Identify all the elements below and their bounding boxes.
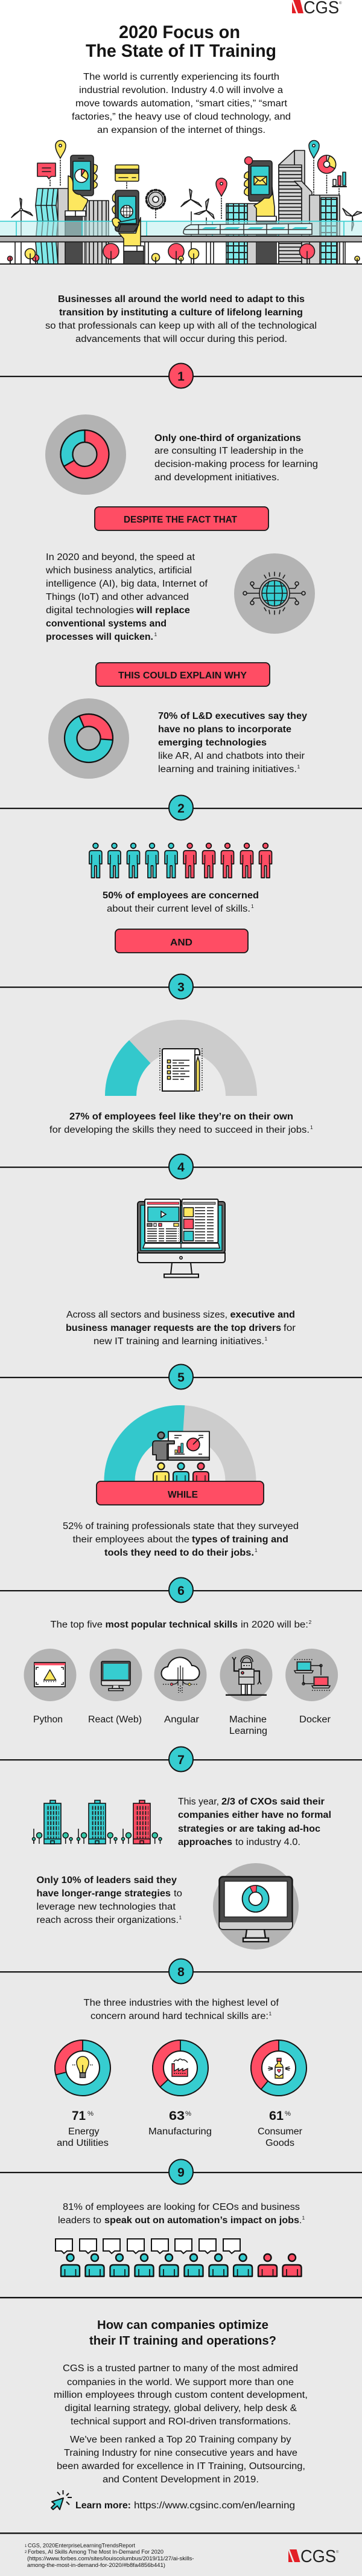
- skill: machine learning: Learning: [229, 1726, 267, 1736]
- text: 50 percent of employees: 50% of employees are concerned: [103, 890, 259, 901]
- text: learn more: [75, 2500, 295, 2511]
- monorail train: [183, 224, 312, 234]
- thin poles centre: [145, 211, 345, 264]
- text: 50 percent of employees: [103, 890, 259, 914]
- text: 52 percent of training professionals: types of training and: [192, 1534, 288, 1545]
- stat: manufacturing: [148, 2040, 212, 2137]
- half donut: 27 percent: [105, 1020, 257, 1096]
- icon: factory: [172, 2059, 188, 2076]
- intro text: factories,” the heavy use of cloud technology, and: [72, 112, 291, 122]
- text: speed of change: conventional systems and: [46, 619, 167, 629]
- text: top drivers: business manager requests are the top drivers: [66, 1323, 281, 1333]
- text: 10 percent of leaders: leverage new technologies that: [36, 1902, 176, 1912]
- intro text: an expansion of the internet of things.: [97, 125, 265, 135]
- skill: machine learning: [220, 1649, 273, 1736]
- skill: python: [24, 1649, 76, 1725]
- number badge 9: [0, 2159, 362, 2185]
- number badge 5: 5: [177, 1371, 185, 1385]
- text: top drivers: new IT training and learning initiatives.: [94, 1336, 264, 1347]
- dark sleeve left: [65, 214, 83, 264]
- number badge 4: [0, 1154, 362, 1179]
- text: 81 percent of employees: [58, 2202, 305, 2226]
- text: top five skills: The top five: [51, 1620, 103, 1630]
- text: 50 percent of employees: 1: [251, 903, 254, 909]
- right teal grid building: [226, 204, 257, 264]
- text: 70 percent of L&D executives: 1: [297, 764, 300, 770]
- text: about CGS: digital learning strategy, global delivery, help desk &: [65, 2403, 297, 2413]
- icon: map pin red: [216, 178, 227, 219]
- stat: energy and utilities: Energy: [68, 2127, 100, 2137]
- text: 70 percent of L&D executives: 70% of L&D executives say they: [158, 711, 307, 721]
- icon: phone with envelope held in hand: [244, 157, 276, 221]
- footnotes: Forbes, AI Skills Among The Most In-Demand For 2020: [28, 2549, 164, 2555]
- text: 10 percent of leaders: to: [174, 1889, 182, 1899]
- text: two thirds of CXOs: to industry 4.0.: [235, 1837, 300, 1847]
- footnotes: 2: [25, 2551, 27, 2554]
- trees: [7, 243, 360, 264]
- right grey and teal building: [310, 195, 340, 264]
- logo: CGS top: ®: [339, 1, 342, 5]
- heading: how can companies optimize: [89, 2319, 276, 2348]
- text: awards: We've been ranked a Top 20 Training company by: [70, 2435, 291, 2445]
- text: 52 percent of training professionals: their employees about the: [72, 1534, 189, 1545]
- number badge 7: [0, 1747, 362, 1771]
- text: speed of change: processes will quicken.: [46, 632, 153, 642]
- logo: CGS bottom: CGS: [300, 2547, 336, 2566]
- title: 2020 Focus on: [119, 22, 240, 42]
- icon: left wind turbine: [11, 198, 33, 264]
- text: one third of organizations: [154, 433, 318, 483]
- footnotes: 1: [25, 2545, 27, 2548]
- number badge 2: [0, 795, 362, 820]
- intro statement: [45, 294, 317, 344]
- icon: credit card: [115, 165, 139, 190]
- text: 52 percent of training professionals: 52% of training professionals state that they surveyed: [63, 1521, 299, 1531]
- skill: react web: [88, 1649, 142, 1725]
- button: and: [115, 929, 248, 953]
- text: 52 percent of training professionals: [63, 1521, 299, 1558]
- text: two thirds of CXOs: 2/3 of CXOs said their: [221, 1797, 325, 1807]
- icon: presenter and audience: [153, 1432, 209, 1482]
- text: top drivers: 1: [264, 1336, 268, 1342]
- intro text: The world is currently experiencing its fourth: [83, 72, 279, 82]
- number badge 1: [0, 364, 362, 388]
- footnotes: among-the-most-in-demand-for-2020/#b8fa4856b441): [27, 2562, 165, 2569]
- text: 81 percent of employees: .: [299, 2215, 302, 2226]
- text: awards: been awarded for excellence in IT Training, Outsourcing,: [57, 2461, 305, 2471]
- number badge 3: 3: [177, 980, 185, 994]
- text: one third of organizations: Only one-third of organizations: [154, 433, 301, 443]
- donut: one third: [45, 414, 126, 495]
- stat: consumer goods: %: [285, 2110, 291, 2117]
- number badge 6: [0, 1578, 362, 1602]
- text: awards: [57, 2435, 305, 2485]
- left glass building: [36, 188, 68, 264]
- icon: chat bubble: [37, 163, 56, 187]
- stat: energy and utilities: 71: [72, 2109, 86, 2123]
- icon: desktop with e-learning book: [138, 1199, 225, 1277]
- pictogram: three buildings: [33, 1800, 162, 1844]
- logo: CGS bottom: ®: [336, 2550, 339, 2554]
- intro statement: transition by instituting a culture of lifelong learning: [59, 308, 303, 318]
- text: top five skills: in 2020 will be:: [241, 1620, 308, 1630]
- text: 81 percent of employees: 81% of employees are looking for CEOs and business: [63, 2202, 300, 2212]
- text: 27 percent of employees: 1: [310, 1124, 313, 1130]
- text: awards: Training Industry for nine consecutive years and have: [64, 2448, 297, 2458]
- icon: phone with globe and hand: [112, 190, 144, 264]
- text: three industries: 1: [269, 2011, 272, 2017]
- text: speed of change: [45, 552, 208, 642]
- text: two thirds of CXOs: approaches: [178, 1837, 232, 1847]
- number badge 8: [0, 1959, 362, 1984]
- text: three industries: concern around hard technical skills are:: [91, 2011, 268, 2021]
- footnotes: [25, 2542, 194, 2569]
- text: 10 percent of leaders: have longer-range strategies: [36, 1889, 171, 1899]
- footnotes: (https://www.forbes.com/sites/louiscolumbus/2019/11/27/ai-skills-: [27, 2555, 194, 2562]
- text: 81 percent of employees: 1: [302, 2215, 305, 2221]
- text: three industries: The three industries with the highest level of: [83, 1998, 279, 2008]
- button: despite the fact that: [95, 507, 268, 530]
- text: 70 percent of L&D executives: have no plans to incorporate: [158, 724, 291, 735]
- number badge 1: 1: [177, 370, 185, 384]
- intro text: [72, 72, 291, 135]
- text: 70 percent of L&D executives: emerging technologies: [158, 738, 267, 748]
- icon: phone with pie held in hand: [65, 155, 97, 216]
- text: 27 percent of employees: [49, 1112, 313, 1135]
- icon: light bulb: [72, 2056, 93, 2078]
- text: 70 percent of L&D executives: learning and training initiatives.: [158, 764, 297, 774]
- illustration: smart city skyline: [0, 140, 362, 265]
- button: and: AND: [170, 938, 192, 948]
- skill: react web: React (Web): [88, 1715, 142, 1725]
- text: 10 percent of leaders: reach across their organizations.: [36, 1915, 179, 1925]
- right turbines: [181, 189, 362, 231]
- number badge 7: 7: [177, 1753, 185, 1767]
- text: learn more: https://www.cgsinc.com/en/learning: [134, 2500, 295, 2511]
- number badge 5: [0, 1364, 362, 1389]
- text: two thirds of CXOs: This year,: [178, 1797, 219, 1807]
- icon: monitor with donut: [213, 1863, 299, 1950]
- text: speed of change: which business analytics, artificial: [45, 565, 192, 576]
- button: while: WHILE: [168, 1490, 198, 1500]
- text: 10 percent of leaders: 1: [179, 1914, 182, 1921]
- text: top drivers: for: [284, 1323, 296, 1333]
- tall isometric building: [279, 150, 312, 264]
- heading: how can companies optimize: their IT training and operations?: [89, 2334, 276, 2348]
- skill: angular: Angular: [164, 1715, 199, 1725]
- skill: python: Python: [33, 1715, 63, 1725]
- footnotes: CGS, 2020EnterpriseLearningTrendsReport: [28, 2542, 135, 2549]
- text: top five skills: 2: [309, 1619, 311, 1625]
- number badge 4: 4: [177, 1161, 185, 1174]
- text: one third of organizations: decision-making process for learning: [154, 459, 318, 469]
- text: speed of change: will replace: [136, 605, 190, 616]
- stat: consumer goods: Goods: [265, 2138, 294, 2148]
- stat: consumer goods: [251, 2040, 306, 2148]
- stat: energy and utilities: and Utilities: [57, 2138, 109, 2148]
- number badge 8: 8: [177, 1965, 185, 1979]
- icon: cursor click: [51, 2490, 72, 2510]
- text: top drivers: [66, 1310, 296, 1347]
- text: speed of change: 1: [154, 631, 157, 637]
- text: speed of change: Things (IoT) and other advanced: [46, 592, 189, 602]
- text: about CGS: technical support and ROI-driven transformations.: [71, 2417, 291, 2427]
- text: 52 percent of training professionals: 1: [255, 1547, 258, 1553]
- stat: energy and utilities: %: [87, 2110, 94, 2117]
- striped building: [86, 201, 109, 264]
- intro text: move towards automation, “smart cities,” “smart: [75, 98, 288, 109]
- text: 52 percent of training professionals: tools they need to do their jobs.: [104, 1548, 254, 1558]
- intro statement: Businesses all around the world need to adapt to this: [58, 294, 305, 304]
- icon: donut chart: [317, 155, 336, 195]
- icon: map pin yellow: [56, 140, 66, 187]
- pictogram: people with speech bubbles: [56, 2239, 302, 2276]
- text: about CGS: CGS is a trusted partner to many of the most admired: [63, 2363, 298, 2374]
- street building repeats below road: [256, 242, 276, 264]
- text: two thirds of CXOs: strategies or are taking ad-hoc: [178, 1824, 320, 1834]
- text: learn more: Learn more:: [75, 2500, 131, 2511]
- icon: bottle: [268, 2058, 290, 2078]
- pictogram: ten people: [89, 843, 272, 878]
- text: 81 percent of employees: speak out on automation’s impact on jobs: [104, 2215, 299, 2226]
- button: this could explain why: [96, 663, 270, 686]
- title: [86, 22, 276, 61]
- stat: manufacturing: 63: [169, 2109, 185, 2123]
- stat: manufacturing: Manufacturing: [148, 2127, 212, 2137]
- skill: docker: [285, 1649, 338, 1725]
- text: one third of organizations: are consulting IT leadership in the: [154, 446, 303, 456]
- icon: map pin teal: [309, 140, 319, 195]
- text: 70 percent of L&D executives: [158, 711, 307, 774]
- text: 50 percent of employees: about their current level of skills.: [107, 904, 250, 914]
- intro text: industrial revolution. Industry 4.0 will involve a: [79, 85, 283, 95]
- text: top five skills: [51, 1619, 311, 1630]
- rail glass overlay: [0, 222, 362, 236]
- text: awards: and Content Development in 2019.: [103, 2475, 259, 2485]
- number badge 2: 2: [177, 802, 185, 816]
- icon: globe with circuits: [234, 553, 315, 634]
- text: top five skills: most popular technical skills: [105, 1620, 238, 1630]
- text: two thirds of CXOs: companies either have no formal: [178, 1810, 331, 1820]
- dark right sleeve: [256, 217, 276, 264]
- number badge 9: 9: [177, 2166, 185, 2180]
- icon: gear: [146, 190, 165, 219]
- donut: 70 percent: [48, 698, 129, 779]
- text: 10 percent of leaders: [36, 1875, 182, 1925]
- text: two thirds of CXOs: [178, 1797, 331, 1847]
- stat: consumer goods: 61: [269, 2109, 284, 2123]
- elevated road: [0, 236, 362, 242]
- stat: energy and utilities: [55, 2040, 110, 2148]
- text: 10 percent of leaders: Only 10% of leaders said they: [36, 1875, 177, 1885]
- button: this could explain why: THIS COULD EXPLAIN WHY: [118, 671, 247, 681]
- text: top drivers: Across all sectors and business sizes,: [66, 1310, 227, 1320]
- number badge 6: 6: [177, 1584, 185, 1598]
- text: one third of organizations: and development initiatives.: [154, 472, 279, 483]
- icon: bar chart: [332, 172, 346, 195]
- text: speed of change: digital technologies: [46, 605, 134, 616]
- stat: manufacturing: %: [185, 2110, 191, 2117]
- stat: consumer goods: Consumer: [258, 2127, 302, 2137]
- intro statement: so that professionals can keep up with all of the technological: [45, 321, 317, 331]
- text: three industries: [83, 1998, 279, 2021]
- text: 27 percent of employees: for developing the skills they need to succeed in their jobs.: [49, 1125, 310, 1135]
- number badge 3: [0, 974, 362, 999]
- title: The State of IT Training: [86, 41, 276, 61]
- text: about CGS: million employees through custom content development,: [54, 2390, 308, 2400]
- half donut: 52 percent: [104, 1405, 256, 1481]
- skill: angular: [154, 1649, 206, 1725]
- button: while: [97, 1481, 264, 1505]
- button: despite the fact that: DESPITE THE FACT THAT: [124, 515, 238, 525]
- text: 81 percent of employees: leaders to: [58, 2215, 101, 2226]
- skill: docker: Docker: [299, 1715, 331, 1725]
- text: about CGS: companies in the world. We support more than one: [67, 2377, 294, 2388]
- heading: how can companies optimize: How can companies optimize: [97, 2319, 268, 2332]
- text: about CGS: [54, 2363, 308, 2427]
- text: top drivers: executive and: [230, 1310, 295, 1320]
- text: speed of change: In 2020 and beyond, the speed at: [46, 552, 195, 562]
- intro statement: advancements that will occur during this period.: [75, 334, 287, 344]
- text: speed of change: intelligence (AI), big data, Internet of: [46, 579, 208, 589]
- text: 27 percent of employees: 27% of employees feel like they’re on their own: [69, 1112, 293, 1122]
- skill: machine learning: Machine: [229, 1715, 267, 1725]
- icon: notepad and pencil: [160, 1048, 202, 1092]
- text: 70 percent of L&D executives: like AR, AI and chatbots into their: [158, 751, 305, 761]
